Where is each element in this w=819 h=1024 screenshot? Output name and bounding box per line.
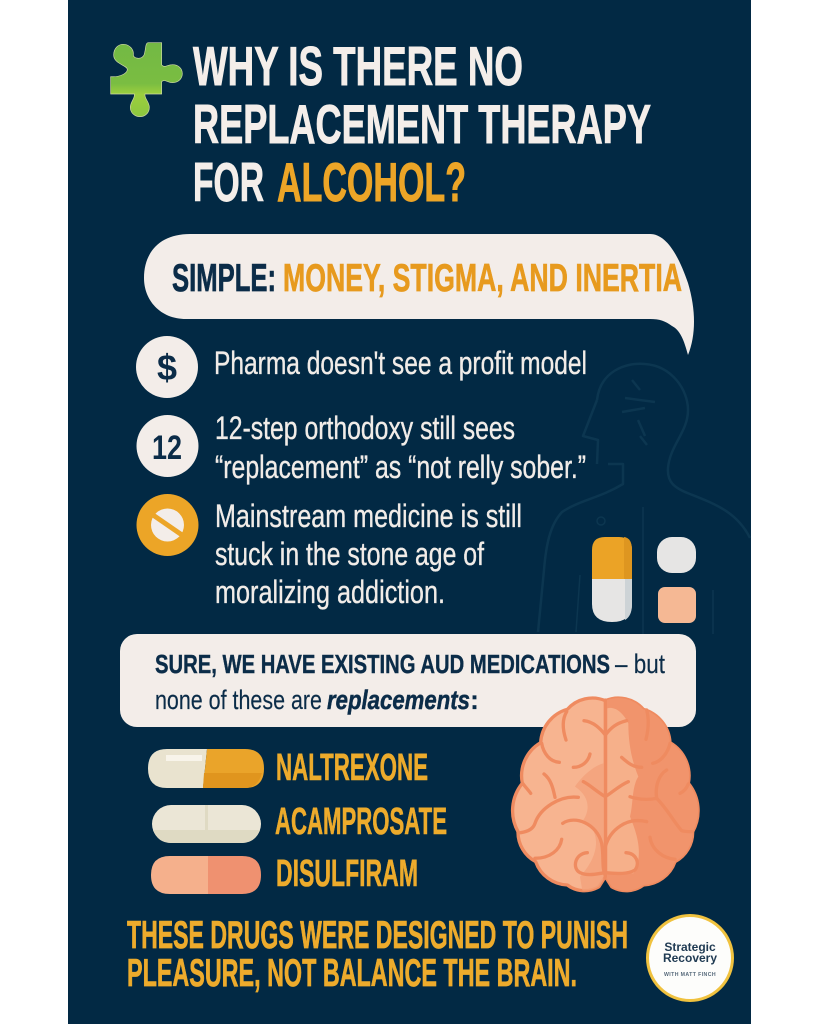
panel: existing AUD medications: replacements bbox=[327, 685, 470, 715]
icon: green puzzle piece bbox=[111, 43, 182, 117]
faint human silhouette bbox=[538, 364, 750, 634]
list item: 12-step: “replacement” as “not relly sober.” bbox=[215, 449, 586, 485]
panel: existing AUD medications: SURE, WE HAVE EXISTING AUD MEDICATIONS bbox=[155, 649, 610, 679]
panel: existing AUD medications: none of these are bbox=[155, 685, 322, 715]
panel: existing AUD medications: : bbox=[470, 685, 479, 715]
pill: naltrexone: NALTREXONE bbox=[276, 747, 428, 789]
pill: disulfiram: DISULFIRAM bbox=[276, 853, 418, 895]
panel: existing AUD medications bbox=[120, 634, 696, 727]
list item: 12-step bbox=[136, 410, 586, 485]
pill: acamprosate bbox=[152, 801, 447, 843]
logo: Strategic Recovery: Strategic bbox=[664, 940, 716, 954]
icon: brain bbox=[513, 690, 705, 900]
speech bubble: simple answer: SIMPLE: bbox=[172, 257, 276, 300]
speech bubble: simple answer bbox=[144, 234, 694, 355]
list item: 12-step: 12 bbox=[152, 429, 182, 467]
pill: disulfiram bbox=[151, 853, 418, 895]
title: ALCOHOL? bbox=[277, 151, 466, 213]
icon: capsule and tablets bbox=[592, 537, 696, 623]
title bbox=[193, 35, 651, 213]
list item: mainstream medicine bbox=[136, 494, 522, 610]
title: FOR bbox=[193, 151, 264, 213]
list item: pharma: Pharma doesn't see a profit model bbox=[214, 345, 587, 381]
logo: Strategic Recovery: WITH MATT FINCH bbox=[664, 972, 716, 978]
list item: mainstream medicine: stuck in the stone age of bbox=[215, 536, 484, 572]
pill: acamprosate: ACAMPROSATE bbox=[275, 801, 447, 843]
logo: Strategic Recovery bbox=[648, 916, 732, 1000]
closing statement bbox=[127, 914, 628, 995]
list item: mainstream medicine: moralizing addiction. bbox=[215, 574, 445, 610]
title: WHY IS THERE NO bbox=[193, 35, 523, 97]
list item: pharma bbox=[136, 336, 587, 398]
logo: Strategic Recovery: Recovery bbox=[663, 951, 717, 965]
pill: naltrexone bbox=[148, 747, 428, 789]
list item: mainstream medicine: Mainstream medicine is still bbox=[215, 498, 522, 534]
list item: pharma: $ bbox=[157, 347, 177, 388]
list item: 12-step: 12-step orthodoxy still sees bbox=[215, 410, 515, 446]
panel: existing AUD medications: – but bbox=[615, 649, 665, 679]
